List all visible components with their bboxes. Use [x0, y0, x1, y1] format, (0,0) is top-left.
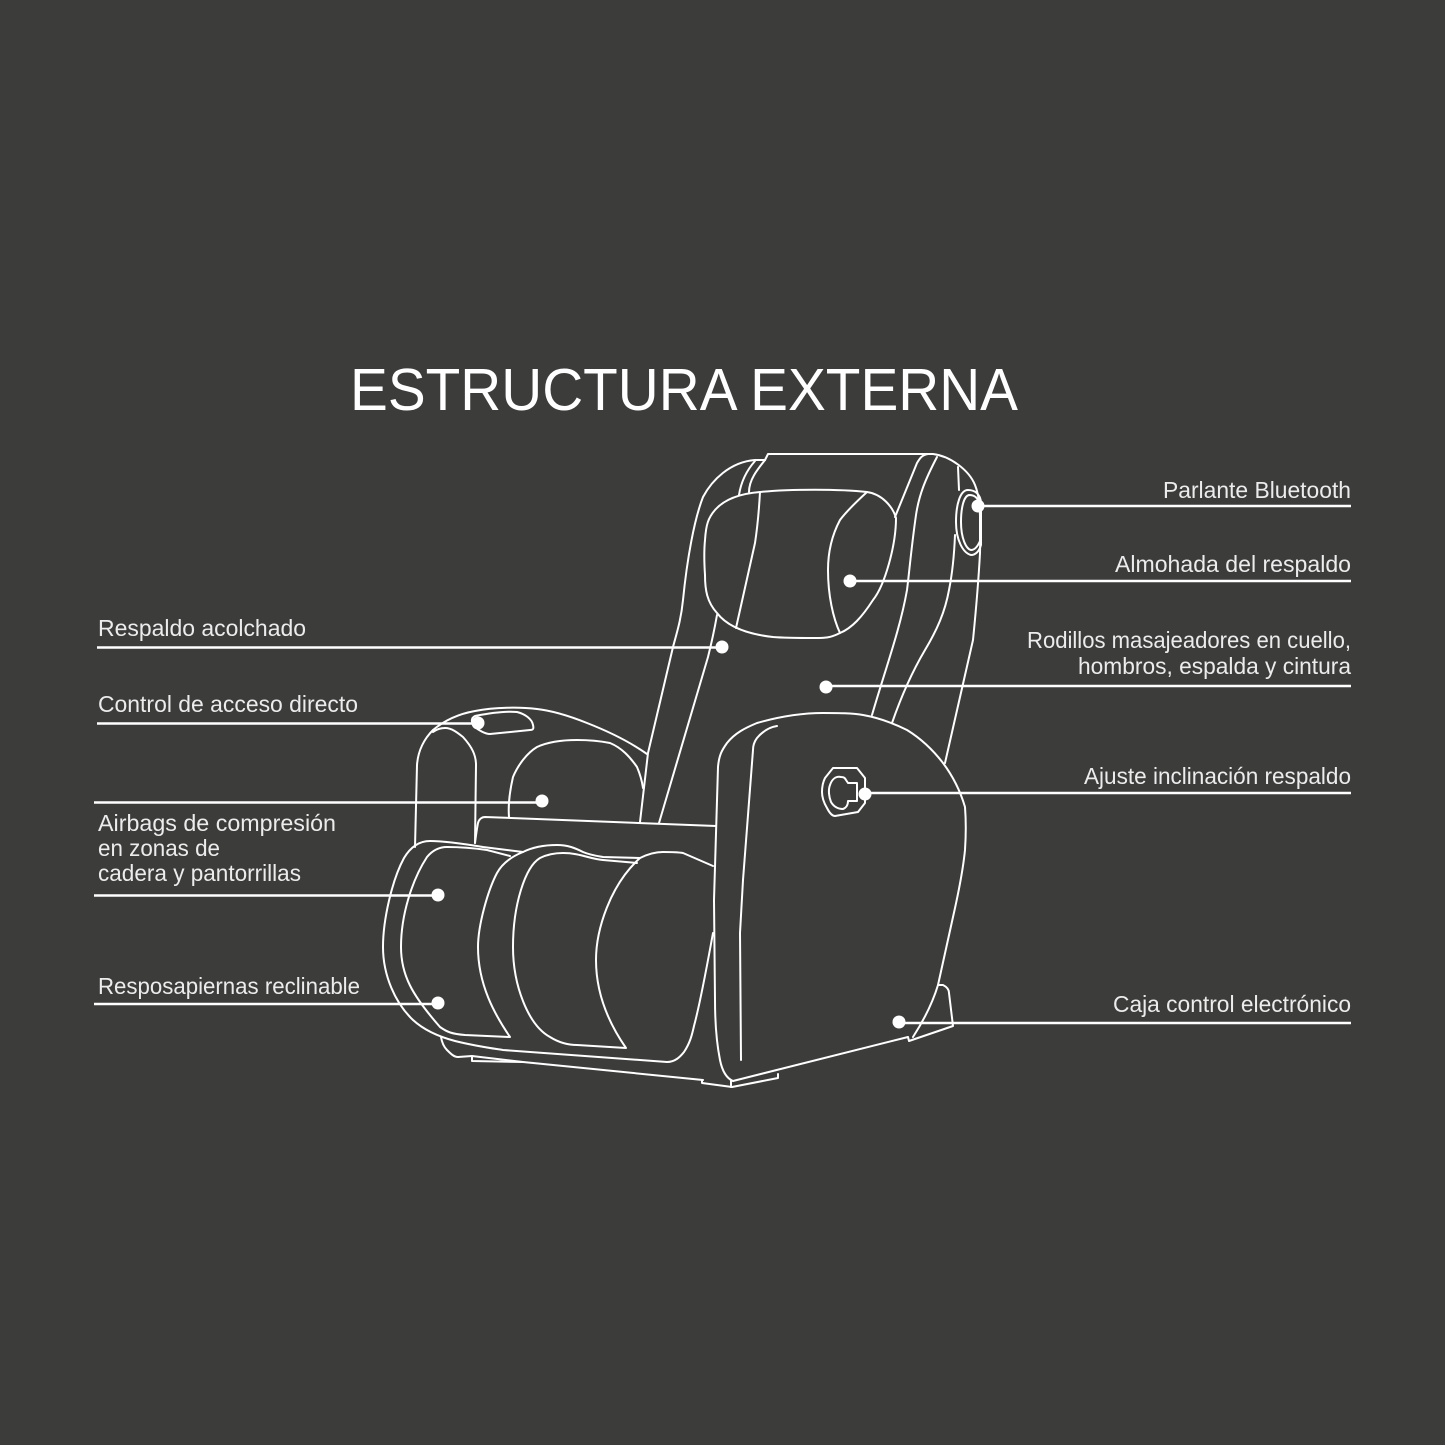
callout: Airbags de compresión: cadera y pantorrillas	[98, 860, 301, 886]
icon: bluetooth speaker	[956, 490, 981, 555]
callout: Control de acceso directo: Control de acceso directo	[98, 691, 358, 717]
right armrest and side panel	[714, 713, 966, 1081]
callout: Parlante Bluetooth: Parlante Bluetooth	[1163, 477, 1351, 503]
backrest pillow	[704, 490, 896, 638]
callout: Control de acceso directo	[97, 691, 484, 730]
callout: Rodillos masajeadores	[820, 627, 1351, 694]
callout: Caja control electrónico: Caja control electrónico	[1113, 991, 1351, 1017]
callout: Ajuste inclinación respaldo	[858, 763, 1351, 800]
title: ESTRUCTURA EXTERNA	[350, 357, 1019, 423]
left armrest	[415, 708, 647, 847]
callout: Airbags de compresión: en zonas de	[98, 835, 220, 861]
callout: Rodillos masajeadores: Rodillos masajeadores en cuello,	[1027, 627, 1351, 653]
callout: Almohada del respaldo: Almohada del respaldo	[1115, 551, 1351, 577]
reclining leg rest	[383, 841, 713, 1080]
callout: Rodillos masajeadores: hombros, espalda y cintura	[1078, 653, 1351, 679]
chair feet	[702, 1074, 778, 1087]
seat cushion	[475, 817, 716, 843]
callout: Ajuste inclinación respaldo: Ajuste inclinación respaldo	[1084, 763, 1351, 789]
callout: Caja control electrónico	[892, 991, 1351, 1028]
electronic control box	[908, 985, 953, 1041]
callout: Airbags de compresión	[94, 794, 548, 902]
callout: Resposapiernas reclinable: Resposapiernas reclinable	[98, 973, 360, 999]
callout: Almohada del respaldo	[844, 551, 1351, 588]
callout: Respaldo acolchado: Respaldo acolchado	[98, 615, 306, 641]
callout: Resposapiernas reclinable	[94, 973, 444, 1010]
massage chair line drawing	[383, 454, 981, 1087]
chair backrest	[640, 454, 980, 823]
icon: backrest recline knob	[822, 768, 865, 816]
callout: Respaldo acolchado	[97, 615, 728, 654]
callout: Parlante Bluetooth	[972, 477, 1351, 512]
callout: Airbags de compresión: Airbags de compresión	[98, 810, 336, 836]
icon: direct-access control	[472, 712, 533, 734]
